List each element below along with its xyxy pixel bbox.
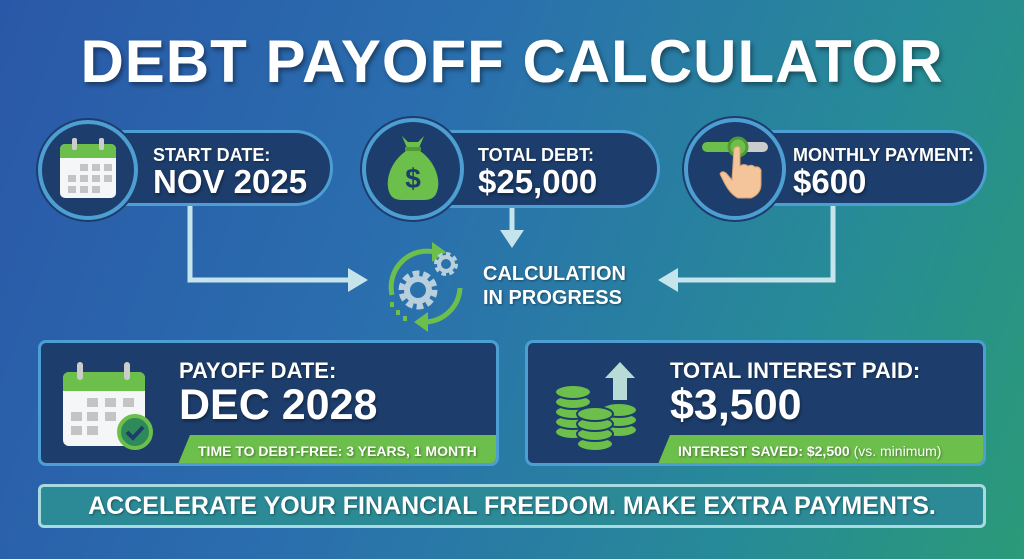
input: monthly payment: $600 [793,163,866,200]
icon: calendar check [63,362,153,450]
icon: money bag: $ [405,163,421,194]
icon: slider hand [702,136,768,198]
text: calculation in progress [483,263,627,309]
panel: payoff date: DEC 2028 [179,381,377,429]
input: start date [36,118,333,222]
banner: ACCELERATE YOUR FINANCIAL FREEDOM. MAKE EXTRA PAYMENTS. [88,492,936,520]
input: start date: START DATE: [153,145,270,165]
icon: coins with arrow [556,362,636,450]
input: total debt: TOTAL DEBT: [478,145,594,165]
banner [38,484,986,528]
input: monthly payment: MONTHLY PAYMENT: [793,145,974,165]
text: calculation in progress: CALCULATION [483,263,626,285]
icon: calendar [60,138,116,198]
panel: total interest: $3,500 [670,381,802,429]
panel: total interest [525,340,986,466]
input: monthly payment [682,116,987,222]
input: total debt [360,116,660,222]
strip: interest saved [658,435,983,463]
strip: time to debt-free [178,435,496,463]
strip: interest saved: INTEREST SAVED: $2,500 (vs. minimum) [678,443,941,459]
strip: time to debt-free: TIME TO DEBT-FREE: 3 YEARS, 1 MONTH [198,443,477,459]
input: total debt: $25,000 [478,163,597,200]
icon: gears with cycle arrows [388,242,462,332]
text: calculation in progress: IN PROGRESS [483,287,622,309]
panel: total interest: TOTAL INTEREST PAID: [670,358,920,383]
icon: money bag [388,136,438,200]
panel: payoff date [38,340,499,466]
panel: payoff date: PAYOFF DATE: [179,358,336,383]
title: DEBT PAYOFF CALCULATOR [80,28,944,95]
input: start date: NOV 2025 [153,163,307,200]
